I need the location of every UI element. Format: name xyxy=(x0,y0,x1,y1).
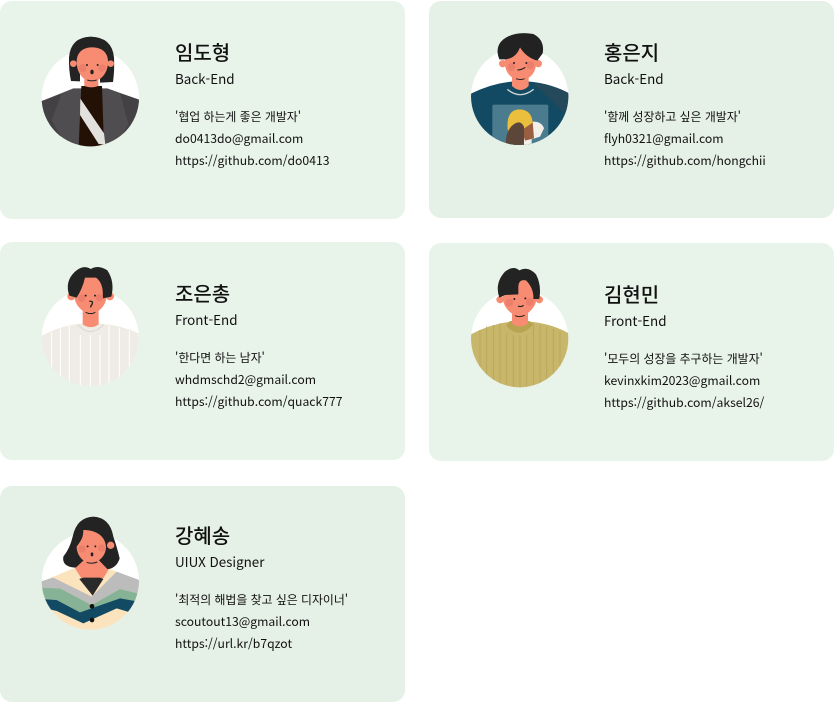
text block: 김현민: https://github.com/aksel26/ xyxy=(604,393,764,411)
icon: 조은총 avatar xyxy=(42,267,139,386)
panel: 임도형 card xyxy=(0,1,405,219)
text block: 홍은지: https://github.com/hongchii xyxy=(604,151,766,169)
text block: 홍은지: '함께 성장하고 싶은 개발자' xyxy=(604,108,741,125)
text block: 김현민: '모두의 성장을 추구하는 개발자' xyxy=(604,350,763,367)
text block: 강혜송: https://url.kr/b7qzot xyxy=(175,634,292,652)
text block: 홍은지: Back-End xyxy=(604,68,664,88)
text block: 홍은지 xyxy=(604,37,766,169)
text block: 김현민: Front-End xyxy=(604,310,666,330)
text block: 강혜송: '최적의 해법을 찾고 싶은 디자이너' xyxy=(175,591,348,608)
icon: 홍은지 avatar xyxy=(471,33,568,145)
text block: 임도형: https://github.com/do0413 xyxy=(175,151,330,169)
text block: 강혜송: 강혜송 xyxy=(175,520,230,549)
icon: 임도형 avatar xyxy=(42,36,139,146)
text block: 강혜송: UIUX Designer xyxy=(175,551,264,571)
text block: 조은총: '한다면 하는 남자' xyxy=(175,349,265,366)
text block: 홍은지: 홍은지 xyxy=(604,37,659,66)
text block: 조은총: whdmschd2@gmail.com xyxy=(175,370,316,388)
text block: 김현민 xyxy=(604,279,764,411)
panel: 강혜송 card xyxy=(0,486,405,702)
text block: 김현민: kevinxkim2023@gmail.com xyxy=(604,371,760,389)
text block: 강혜송: scoutout13@gmail.com xyxy=(175,612,310,630)
text block: 임도형 xyxy=(175,37,330,169)
panel: 홍은지 card xyxy=(429,1,834,218)
panel: 조은총 card xyxy=(0,242,405,460)
text block: 임도형: 임도형 xyxy=(175,37,230,66)
icon: 김현민 avatar xyxy=(471,268,568,388)
icon: 강혜송 avatar xyxy=(42,516,139,630)
text block: 임도형: '협업 하는게 좋은 개발자' xyxy=(175,108,301,125)
text block: 홍은지: flyh0321@gmail.com xyxy=(604,129,724,147)
text block: 조은총: Front-End xyxy=(175,309,238,329)
text block: 조은총: https://github.com/quack777 xyxy=(175,392,343,410)
text block: 조은총 xyxy=(175,278,343,410)
panel: 김현민 card xyxy=(429,243,834,461)
text block: 김현민: 김현민 xyxy=(604,279,659,308)
text block: 임도형: do0413do@gmail.com xyxy=(175,129,303,147)
text block: 강혜송 xyxy=(175,520,348,652)
text block: 조은총: 조은총 xyxy=(175,278,230,307)
text block: 임도형: Back-End xyxy=(175,68,235,88)
